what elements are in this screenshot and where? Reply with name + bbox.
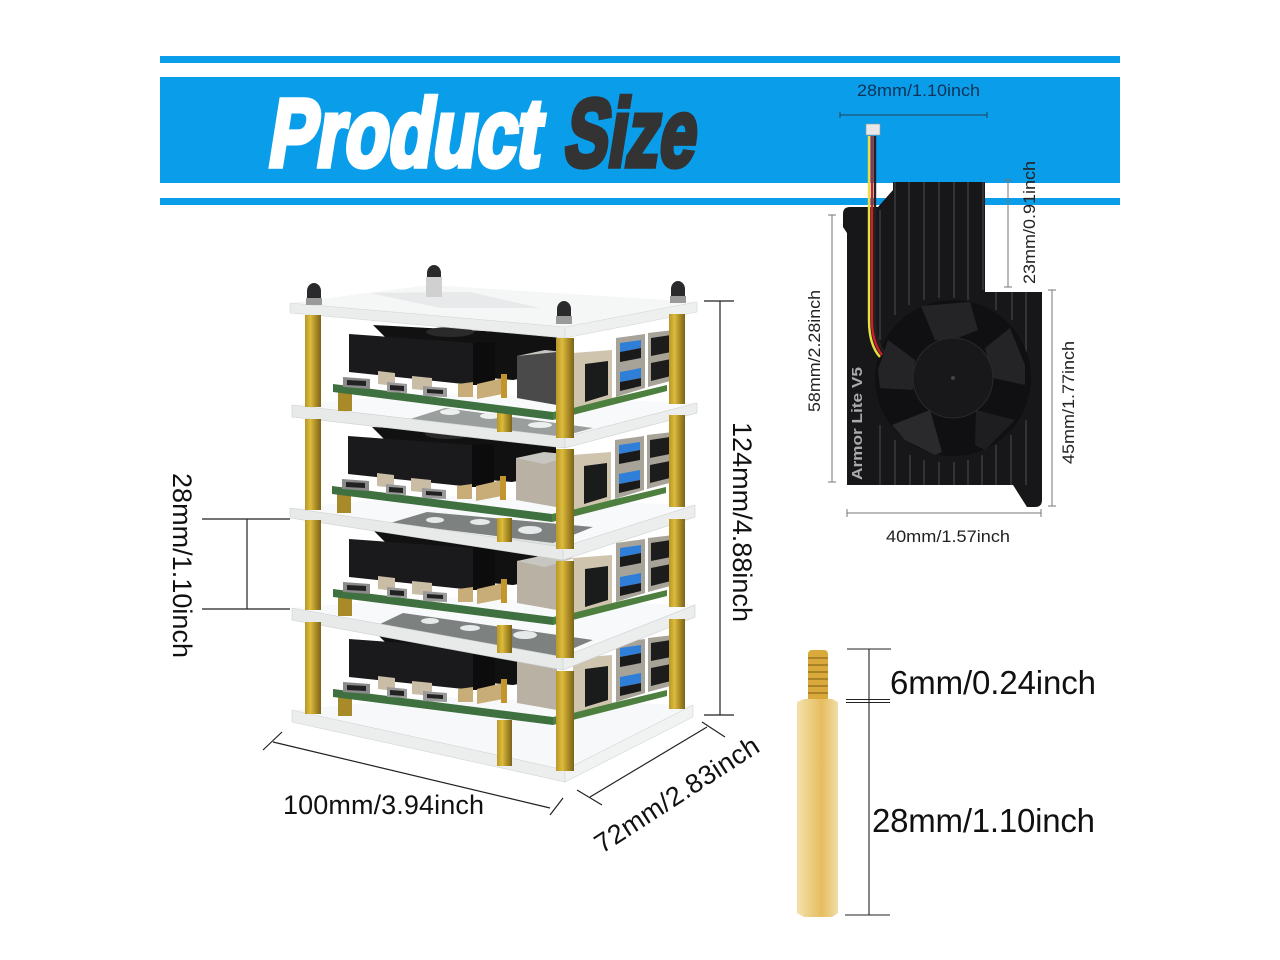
heatsink body [843, 182, 1042, 507]
fan [875, 300, 1031, 456]
title: Product Size: Size [559, 81, 707, 187]
dimension: 40mm [847, 509, 1041, 546]
board 4 [333, 630, 674, 725]
brass standoff [797, 650, 838, 917]
dimension: 45mm: 45mm/1.77inch [1059, 341, 1078, 464]
cable connector [866, 124, 880, 135]
dimension: spacer gap 28mm [167, 473, 290, 658]
heatsink fan cooler [843, 124, 1042, 507]
board 3 [333, 530, 674, 625]
dimension: standoff 6mm and 28mm lines [845, 649, 1096, 915]
dimension: standoff 6mm and 28mm lines: 6mm/0.24inch [890, 664, 1096, 701]
board 2 [332, 427, 673, 522]
dimension: spacer gap 28mm: 28mm/1.10inch [167, 473, 197, 658]
dimension: 58mm: 58mm/2.28inch [805, 290, 824, 412]
dimension: height 124mm [704, 301, 757, 715]
header banner [160, 56, 1120, 205]
dimension: width 72mm: 72mm/2.83inch [589, 730, 765, 859]
board 1 [333, 325, 674, 420]
dimension: connector width 28mm: 28mm/1.10inch [857, 81, 980, 100]
dimension: standoff 6mm and 28mm lines: 28mm/1.10inch [872, 802, 1095, 839]
dimension: upper 23mm [1004, 161, 1039, 287]
left post [305, 315, 321, 714]
cap nuts [306, 265, 686, 324]
dimension: 45mm [1048, 290, 1078, 506]
model label: Armor Lite V5 [849, 367, 866, 480]
fan cable [869, 136, 884, 357]
top plate [290, 285, 697, 338]
dimension: 58mm [805, 215, 836, 482]
dimension: connector width 28mm [840, 81, 987, 118]
dimension: 40mm: 40mm/1.57inch [886, 527, 1010, 546]
dimension: length 100mm [263, 732, 563, 820]
back post, bottom section [497, 720, 512, 766]
dimension: upper 23mm: 23mm/0.91inch [1020, 161, 1039, 284]
plate 3 [290, 495, 695, 560]
title: Product Size: Product [263, 81, 552, 187]
dimension: length 100mm: 100mm/3.94inch [283, 790, 484, 820]
plate 2 [292, 393, 697, 448]
plate 4 [292, 597, 695, 670]
right post [669, 314, 685, 709]
front post [556, 338, 574, 771]
bottom plate [292, 697, 693, 782]
heatsink fins [880, 182, 1026, 485]
dimension: height 124mm: 124mm/4.88inch [727, 422, 757, 622]
acrylic case stack with boards [290, 265, 697, 782]
